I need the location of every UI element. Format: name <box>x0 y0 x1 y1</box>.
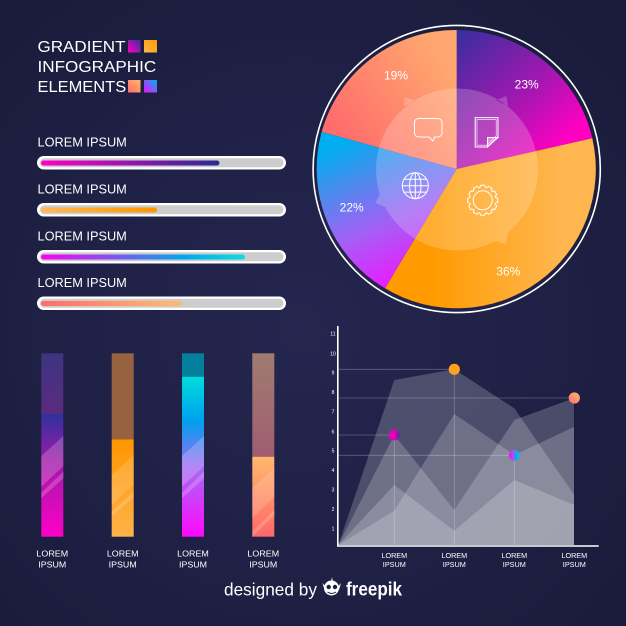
progress bar 3 <box>37 228 286 264</box>
area layers <box>338 369 574 545</box>
footer credit: freepik <box>346 580 402 600</box>
progress bar 1: LOREM IPSUM <box>38 135 127 150</box>
vertical bar 1: LOREM <box>36 549 68 559</box>
colour swatches <box>128 40 157 92</box>
axis tick labels: 9 <box>332 371 335 377</box>
icon: gear <box>468 185 498 215</box>
vertical bar 1 <box>36 353 68 570</box>
slice 22% <box>317 132 457 288</box>
axis tick labels: 8 <box>332 390 335 396</box>
x axis labels: IPSUM <box>383 560 406 569</box>
x axis labels: IPSUM <box>503 560 526 569</box>
data point: magenta <box>389 430 400 440</box>
axis tick labels: 7 <box>332 410 335 416</box>
area chart <box>330 326 599 569</box>
vertical bar 2: LOREM <box>107 549 139 559</box>
slice labels: 36% <box>496 264 521 278</box>
axis tick labels: 4 <box>332 468 335 474</box>
guide lines <box>338 369 574 545</box>
x axis labels: LOREM <box>441 551 467 560</box>
pie chart <box>313 25 600 313</box>
slice labels: 23% <box>515 78 539 92</box>
vertical bar 3: LOREM <box>177 549 209 559</box>
data point: orange <box>449 364 460 375</box>
slice 19% <box>322 30 457 169</box>
progress bar 4: LOREM IPSUM <box>38 275 127 290</box>
vertical bar 1: IPSUM <box>38 560 66 570</box>
progress bar 4 <box>37 275 286 310</box>
outer ring <box>313 25 600 313</box>
vertical bar 2 <box>107 353 139 570</box>
vertical bar 2: IPSUM <box>109 560 137 570</box>
title: ELEMENTS <box>38 79 126 96</box>
slice labels: 19% <box>384 68 408 82</box>
slice labels: 22% <box>340 200 364 214</box>
axis tick labels: 10 <box>330 351 336 357</box>
progress bar 1 <box>37 135 286 170</box>
x axis labels: LOREM <box>381 551 407 560</box>
slice labels <box>340 68 539 278</box>
data point: salmon <box>569 392 580 404</box>
title <box>38 39 157 96</box>
axis tick labels: 1 <box>332 527 335 533</box>
icon: globe <box>402 173 428 199</box>
progress bars panel <box>37 135 286 310</box>
title: GRADIENT <box>38 39 126 56</box>
x axis labels: LOREM <box>501 551 527 560</box>
footer credit: designed by <box>224 580 317 600</box>
progress bar 2: LOREM IPSUM <box>38 182 127 196</box>
slice 23% <box>457 30 592 169</box>
vertical bar 4: IPSUM <box>249 560 277 570</box>
x axis labels: IPSUM <box>563 560 586 569</box>
vertical bar 4: LOREM <box>247 549 279 559</box>
axis tick labels: 6 <box>332 429 335 435</box>
axis tick labels <box>330 332 336 533</box>
vertical bar charts <box>36 353 279 570</box>
vertical bar 3: IPSUM <box>179 560 207 570</box>
progress bar 3: LOREM IPSUM <box>38 228 127 243</box>
footer credit <box>224 577 402 600</box>
axis tick labels: 11 <box>330 332 336 338</box>
axis tick labels: 5 <box>332 449 335 455</box>
axes <box>338 326 599 546</box>
x axis labels: IPSUM <box>443 560 466 569</box>
progress bar 2 <box>37 182 286 216</box>
slice 36% <box>385 138 596 308</box>
title: INFOGRAPHIC <box>38 59 156 76</box>
axis tick labels: 3 <box>332 488 335 494</box>
vertical bar 4 <box>247 353 279 570</box>
inner translucent gear disc <box>376 89 538 251</box>
x axis labels <box>381 551 587 569</box>
icon: freepik mascot <box>322 577 341 596</box>
axis tick labels: 2 <box>332 507 335 513</box>
data point: cyan <box>509 450 520 461</box>
vertical bar 3 <box>177 353 209 570</box>
icon: document <box>475 118 498 147</box>
right edge line <box>574 398 576 545</box>
icon: speech bubble <box>414 118 442 141</box>
x axis labels: LOREM <box>561 551 587 560</box>
